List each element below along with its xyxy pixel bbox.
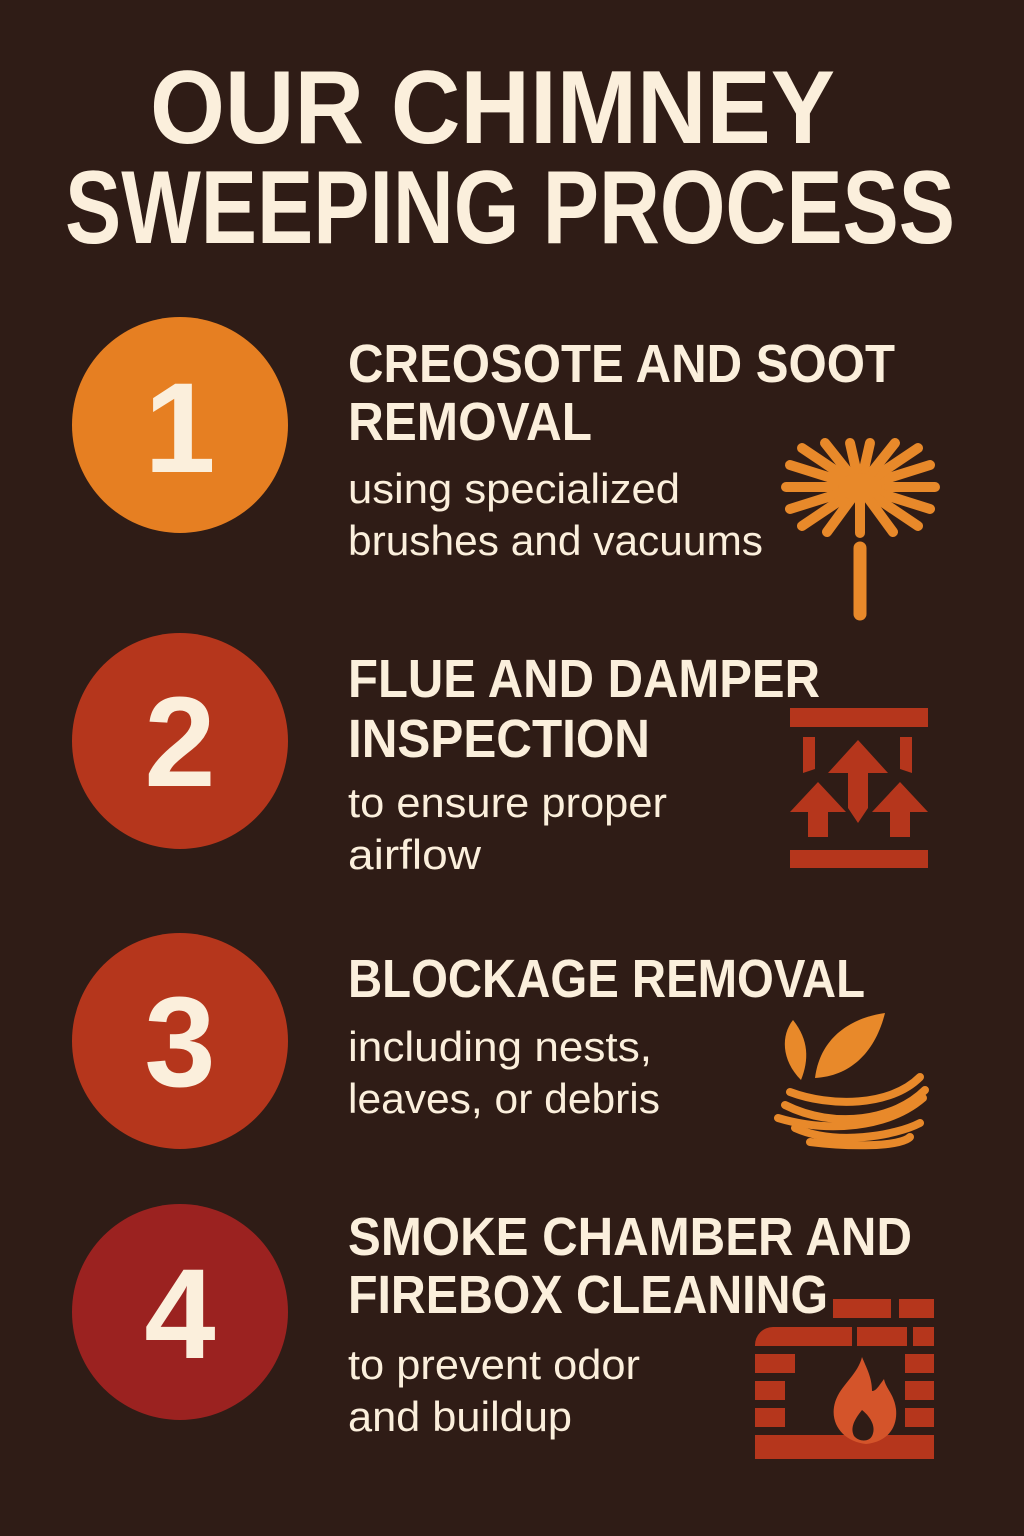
step 3: blockage removal [72,933,925,1149]
step 1: creosote and soot removal [72,317,935,614]
number circle 3 [72,933,288,1149]
number circle 4 [72,1204,288,1420]
heading 4 [348,1207,912,1325]
heading 2: INSPECTION [348,709,650,769]
icon: flue airflow [790,708,928,868]
description 4: to prevent odor [348,1341,640,1388]
title: OUR CHIMNEY [150,50,835,166]
description 3: leaves, or debris [348,1075,660,1122]
description 2: airflow [348,831,482,878]
number circle 4: 4 [144,1243,216,1386]
number circle 1: 1 [144,357,216,500]
heading 1 [348,334,895,452]
heading 4: SMOKE CHAMBER AND [348,1207,912,1267]
heading 2 [348,649,820,769]
number circle 2: 2 [144,671,216,814]
description 3: including nests, [348,1023,652,1070]
number circle 1 [72,317,288,533]
heading 1: CREOSOTE AND SOOT [348,334,895,394]
title [65,50,955,266]
heading 3: BLOCKAGE REMOVAL [348,949,865,1009]
step 2: flue and damper inspection [72,633,928,878]
description 1: brushes and vacuums [348,517,763,564]
heading 2: FLUE AND DAMPER [348,649,820,709]
icon: chimney brush [786,443,935,614]
description 2: to ensure proper [348,779,667,826]
heading 4: FIREBOX CLEANING [348,1265,828,1325]
number circle 2 [72,633,288,849]
description 1: using specialized [348,465,680,512]
step 4: smoke chamber and firebox cleaning [72,1204,934,1459]
description 4 [348,1341,640,1440]
icon: fireplace [755,1299,934,1459]
description 1 [348,465,763,564]
description 3 [348,1023,660,1122]
icon: nest with leaves [778,1013,925,1145]
description 2 [348,779,667,878]
number circle 3: 3 [144,971,216,1114]
heading 1: REMOVAL [348,392,592,452]
description 4: and buildup [348,1393,572,1440]
